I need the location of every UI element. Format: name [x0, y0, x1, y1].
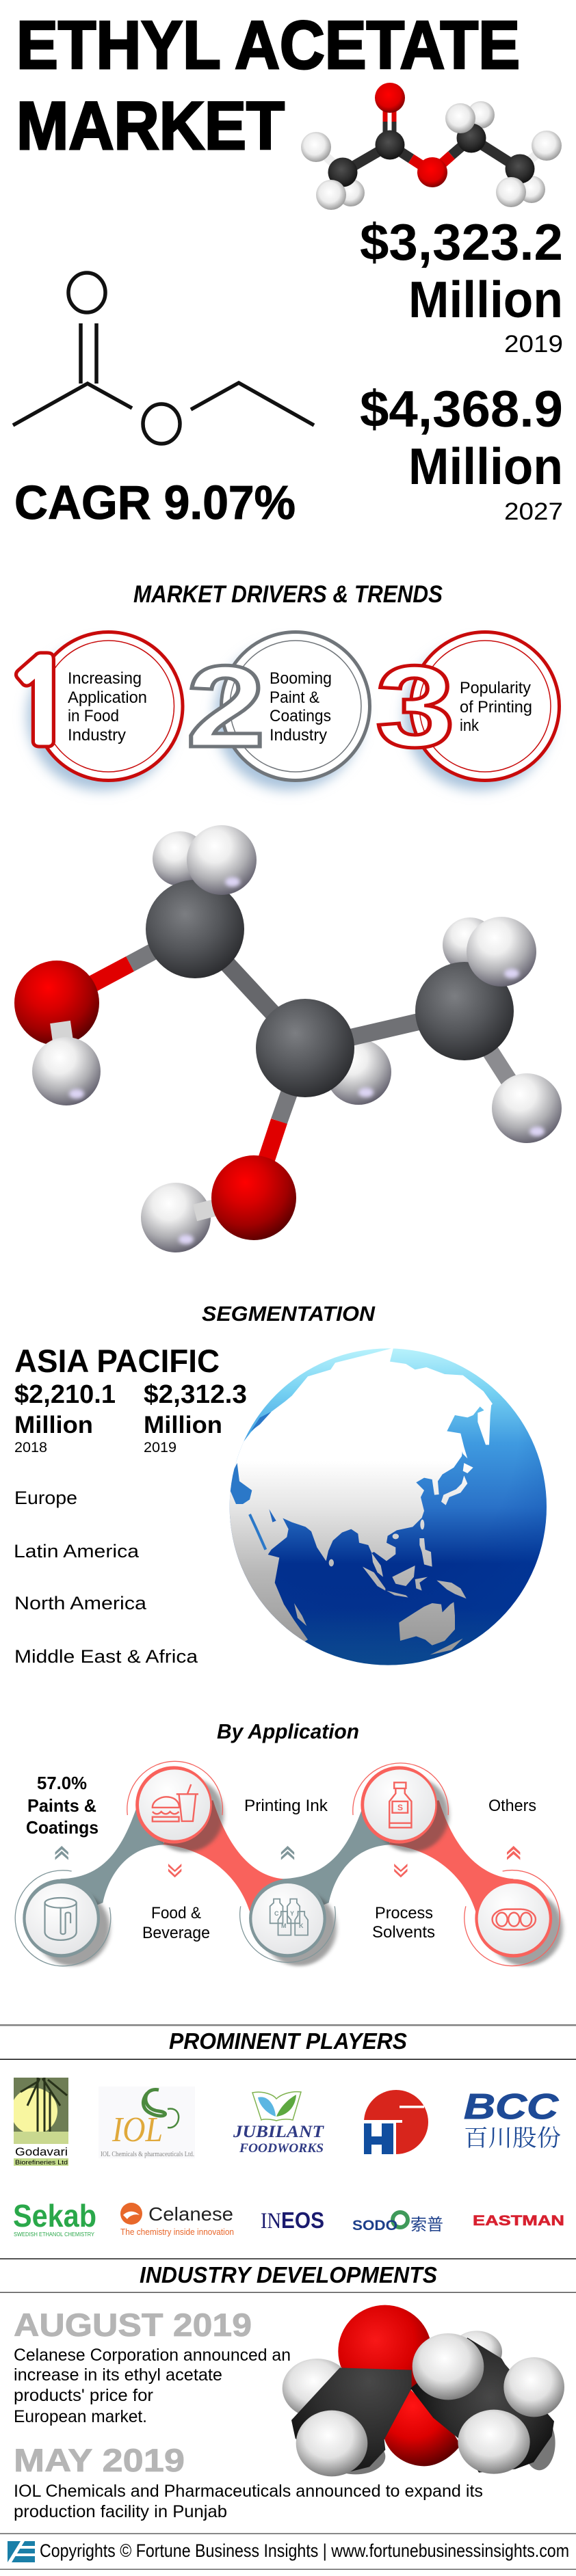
panel: driver 3: of Printing	[460, 698, 532, 716]
logo: Sekab: SWEDISH ETHANOL CHEMISTRY	[14, 2231, 95, 2238]
logo: Sekab: Sekab	[13, 2198, 96, 2233]
logo: INEOS: IN	[261, 2209, 281, 2233]
logo: INEOS: EOS	[281, 2208, 324, 2233]
development: August 2019: increase in its ethyl acetate	[14, 2365, 222, 2385]
logo: Celanese: Celanese	[148, 2203, 233, 2225]
logo: Godavari: Biorefineries Ltd	[15, 2159, 68, 2166]
development: August 2019: Celanese Corporation announced an	[14, 2346, 291, 2365]
node shadows	[35, 1777, 563, 1966]
icon: pipe	[493, 1909, 536, 1930]
market value 2027: $4,368.9	[360, 380, 563, 438]
cmyk icon letters: K	[299, 1922, 304, 1929]
logo: IOL: IOL Chemicals & pharmaceuticals Ltd.	[101, 2151, 194, 2158]
development: August 2019: AUGUST 2019	[14, 2307, 252, 2343]
application labels: Beverage	[142, 1924, 210, 1942]
market value 2019: 2019	[504, 331, 563, 358]
text block: other regions: Latin America	[14, 1541, 140, 1561]
text block: asia pacific: Million	[14, 1412, 93, 1438]
logo: INEOS	[261, 2208, 324, 2233]
icon: cmyk bottles	[270, 1899, 308, 1935]
node rings	[23, 1766, 552, 1957]
CAGR: CAGR 9.07%	[14, 476, 296, 529]
panel: driver 3: Popularity	[460, 679, 531, 697]
application labels	[26, 1773, 536, 1942]
market value 2027	[360, 380, 563, 525]
molecule: large ball and stick	[14, 825, 562, 1252]
panel: driver 1: Industry	[68, 726, 126, 744]
panel: driver 2: Coatings	[270, 707, 331, 725]
panel: driver 3	[376, 632, 560, 790]
icon: paint can	[45, 1898, 77, 1940]
ribbon: gray sections	[61, 1810, 391, 1919]
logo: SODO: SODO	[352, 2218, 397, 2233]
panel: driver 1: Application	[68, 688, 147, 707]
cmyk icon letters: C	[274, 1910, 279, 1917]
panel: driver 1: 1	[5, 647, 77, 760]
application labels: Food &	[151, 1904, 201, 1922]
node discs	[26, 1769, 549, 1954]
logo: Godavari: Godavari	[15, 2145, 68, 2158]
logo: IOL	[99, 2087, 195, 2158]
molecule: space filling model	[283, 2305, 564, 2476]
title: MARKET	[16, 88, 285, 163]
logo: Jubilant FoodWorks: FOODWORKS	[239, 2141, 324, 2156]
text block: other regions: Europe	[14, 1488, 77, 1508]
cmyk icon letters: Y	[290, 1910, 294, 1917]
development: August 2019	[14, 2307, 291, 2426]
logo: Celanese	[120, 2203, 234, 2237]
logo: HT	[363, 2090, 428, 2156]
development: May 2019: MAY 2019	[14, 2442, 185, 2478]
solvent icon letter: S	[397, 1803, 403, 1812]
logo: BCC	[464, 2087, 561, 2153]
market value 2019: $3,323.2	[360, 213, 563, 271]
market value 2019: Million	[408, 271, 563, 328]
ribbon: red sections	[163, 1800, 514, 1912]
text block: asia pacific: Million	[144, 1412, 222, 1438]
market value 2019	[360, 213, 563, 358]
panel: driver 1: in Food	[68, 707, 119, 725]
market value 2027: 2027	[504, 498, 563, 525]
development: May 2019: IOL Chemicals and Pharmaceuticals announced to expand its	[14, 2482, 483, 2501]
development: August 2019: European market.	[14, 2407, 147, 2426]
panel: driver 2	[186, 632, 369, 790]
chart: application ribbon flow	[15, 1761, 563, 1966]
application labels: 57.0%	[37, 1773, 87, 1793]
title: ETHYL ACETATE	[16, 7, 520, 83]
panel: driver 2: 2	[186, 642, 265, 772]
cmyk icon letters	[274, 1910, 304, 1929]
logo: SODO	[352, 2212, 443, 2234]
skeletal formula	[13, 273, 314, 444]
panel: driver 2: Industry	[270, 726, 327, 744]
logo: Jubilant FoodWorks: JUBILANT	[233, 2123, 325, 2141]
development: May 2019: production facility in Punjab	[14, 2502, 227, 2521]
text block: asia pacific: ASIA PACIFIC	[14, 1343, 220, 1379]
panel: driver 1	[5, 632, 183, 790]
footer logo	[8, 2541, 35, 2562]
logo: Eastman: EASTMAN	[473, 2213, 564, 2229]
application labels: Paints &	[27, 1795, 96, 1816]
text block: asia pacific: $2,210.1	[14, 1380, 116, 1409]
panel: driver 2: Booming	[270, 669, 332, 688]
text block: asia pacific: $2,312.3	[144, 1380, 247, 1409]
application labels: Solvents	[372, 1923, 435, 1942]
logo: Godavari	[11, 2078, 68, 2166]
text block: other regions: Middle East & Africa	[14, 1646, 198, 1667]
icon: solvent bottle	[389, 1782, 411, 1827]
application labels: Others	[488, 1797, 536, 1815]
chevrons	[55, 1846, 520, 1877]
text block: asia pacific	[14, 1343, 247, 1455]
cmyk icon letters: M	[281, 1922, 286, 1929]
text block: asia pacific: 2019	[144, 1440, 176, 1455]
application labels: Printing Ink	[244, 1797, 328, 1815]
heading: segmentation: SEGMENTATION	[202, 1302, 376, 1326]
heading: industry developments: INDUSTRY DEVELOPMENTS	[140, 2262, 437, 2287]
outer arcs	[15, 1761, 560, 1966]
panel: driver 2: Paint &	[270, 688, 319, 707]
logo: IOL: IOL	[112, 2110, 163, 2149]
application labels: Process	[375, 1904, 433, 1922]
panel: driver 3: ink	[460, 716, 480, 735]
globe	[221, 1348, 547, 1665]
icon: burger and cup	[153, 1784, 198, 1821]
development: May 2019	[14, 2442, 483, 2521]
heading: prominent players: PROMINENT PLAYERS	[169, 2028, 407, 2054]
logo: BCC: BCC	[464, 2087, 560, 2127]
application labels: Coatings	[26, 1817, 99, 1838]
panel: driver 3: 3	[376, 642, 455, 772]
text block: other regions: North America	[14, 1593, 147, 1613]
panel: driver 1: 1	[5, 647, 77, 760]
logo: BCC: 百川股份	[464, 2119, 561, 2153]
molecule: ball and stick ethyl acetate	[301, 83, 562, 210]
title	[16, 7, 520, 163]
text block: asia pacific: 2018	[14, 1440, 47, 1455]
logo: SODO: 索普	[410, 2216, 443, 2234]
market value 2027: Million	[408, 438, 563, 495]
panel: driver 1: Increasing	[68, 669, 142, 688]
text block: other regions	[14, 1488, 198, 1667]
heading: by application: By Application	[217, 1719, 359, 1743]
logo: Celanese: The chemistry inside innovation	[120, 2227, 234, 2237]
development: August 2019: products' price for	[14, 2386, 153, 2405]
logo: Jubilant FoodWorks	[233, 2092, 325, 2156]
heading: market drivers: MARKET DRIVERS & TRENDS	[133, 581, 443, 608]
